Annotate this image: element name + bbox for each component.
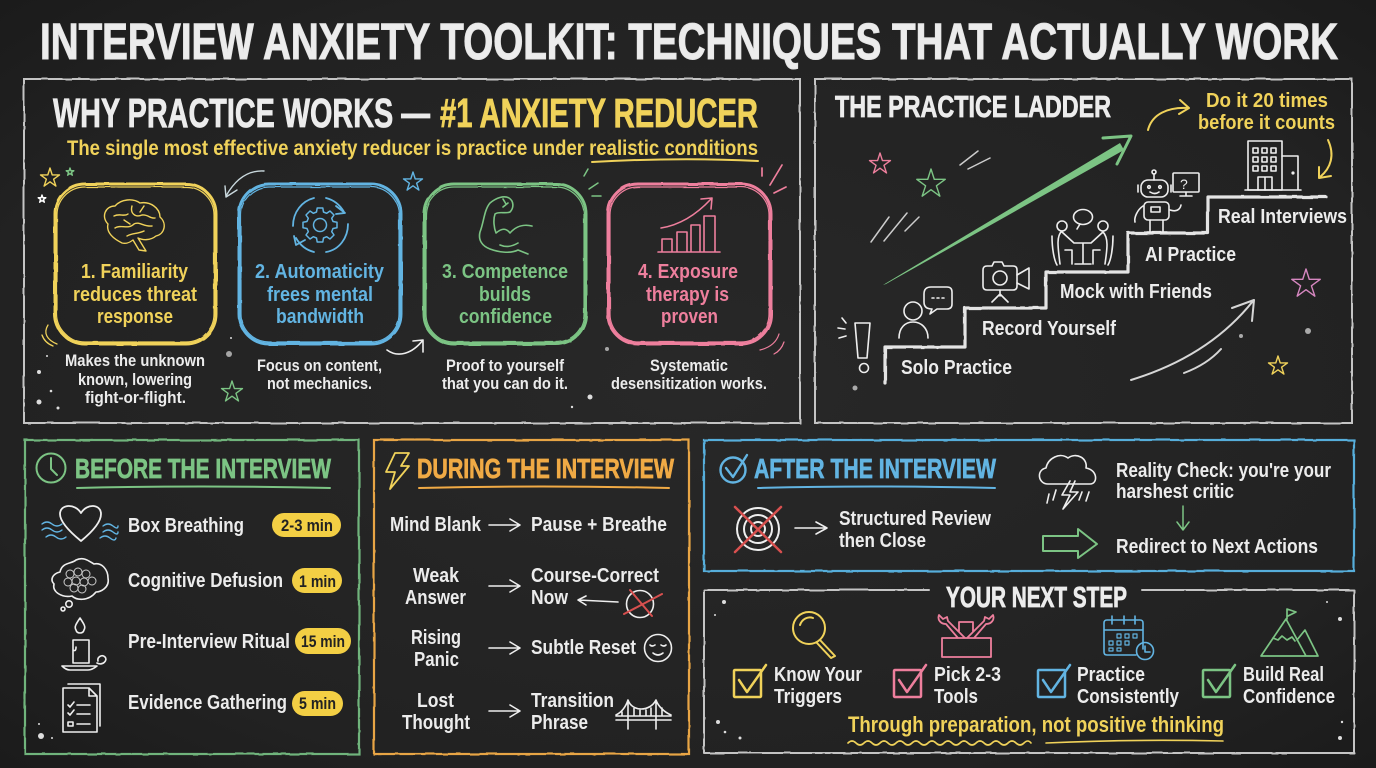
item: know your triggers	[734, 612, 862, 708]
callout: do it 20 times: before it counts	[1198, 112, 1335, 134]
row: weak answer: Answer	[405, 587, 466, 609]
icon: crossed target	[735, 507, 781, 552]
icon: rising bar chart	[658, 198, 720, 252]
item: pick tools	[894, 615, 1001, 708]
panel border	[704, 440, 1354, 571]
step labels: AI Practice	[1145, 244, 1236, 266]
icon: crossed circle	[624, 590, 662, 618]
card 3 caption: that you can do it.	[442, 374, 568, 393]
step labels: Mock with Friends	[1060, 281, 1212, 303]
text: structured review: Structured Review	[839, 508, 991, 530]
icon: clock	[36, 454, 66, 482]
label: Practice	[1077, 664, 1145, 686]
card 2: automaticity	[239, 184, 401, 393]
arrow: curved between cards 2 and 3	[387, 340, 423, 354]
card 1 title: reduces threat	[73, 284, 197, 306]
card 3 caption: Proof to yourself	[446, 356, 564, 375]
time pill: 2-3 min	[281, 516, 333, 535]
arrow	[489, 705, 520, 717]
card 2 caption: not mechanics.	[267, 374, 372, 393]
arrow: green block	[1043, 529, 1097, 558]
card 4 title: therapy is	[646, 284, 729, 306]
text: reality check: harshest critic	[1116, 481, 1234, 503]
panel: during the interview	[374, 440, 689, 754]
icon: robot and monitor	[1135, 170, 1199, 232]
heading underline	[77, 486, 330, 488]
card 4 title: proven	[661, 306, 718, 328]
icon: tangled thought cloud	[52, 559, 108, 611]
row: cognitive defusion	[52, 559, 342, 611]
row: lost thought: Phrase	[531, 712, 588, 734]
label: Tools	[934, 686, 978, 708]
row: weak answer: Now	[531, 587, 568, 609]
icon: check circle	[720, 455, 747, 482]
label: Confidence	[1243, 686, 1335, 708]
text: structured review	[839, 508, 991, 552]
card 2 caption: Focus on content,	[257, 356, 382, 375]
arrow: small green down	[1177, 506, 1189, 530]
arrow	[489, 642, 520, 654]
time pill	[295, 628, 351, 654]
monitor question mark: ?	[1180, 176, 1188, 192]
row: mind blank: Mind Blank	[390, 514, 482, 536]
row: lost thought: Lost	[417, 690, 454, 712]
icon: exclamation	[838, 318, 870, 372]
chalk dust	[38, 723, 53, 739]
card 3 title: builds	[479, 284, 531, 306]
text: structured review: then Close	[839, 530, 926, 552]
row: weak answer: Course-Correct	[531, 565, 659, 587]
row: lost thought: Transition	[531, 690, 614, 712]
text: reality check: Reality Check: you're your	[1116, 460, 1331, 482]
card 1 outline	[55, 184, 216, 344]
label	[1077, 664, 1180, 708]
text: redirect: Redirect to Next Actions	[1116, 536, 1318, 558]
row: rising panic: Panic	[414, 649, 459, 671]
label: Pick 2-3	[934, 664, 1001, 686]
tagline: Through preparation, not positive thinking	[848, 712, 1224, 737]
card 2 caption	[257, 356, 382, 393]
card 2 title: bandwidth	[276, 306, 364, 328]
card 3 title: confidence	[459, 306, 552, 328]
card 2 title: 2. Automaticity	[255, 261, 385, 283]
card 4 title	[638, 261, 738, 328]
icon: brain	[104, 200, 164, 251]
label	[934, 664, 1001, 708]
row: evidence gathering	[63, 684, 343, 732]
panel border	[374, 440, 689, 754]
subheading underline	[592, 159, 758, 162]
staircase	[885, 197, 1326, 383]
label: Consistently	[1077, 686, 1180, 708]
card 1 title: 1. Familiarity	[81, 261, 189, 283]
heading highlight: number one anxiety reducer: #1 ANXIETY REDUCER	[440, 90, 758, 136]
time pill: 15 min	[301, 632, 345, 651]
heading: why practice works: WHY PRACTICE WORKS —	[53, 90, 430, 136]
card 4 caption	[611, 356, 767, 393]
icon: lightning bolt	[386, 453, 409, 489]
tagline underlines	[848, 740, 1223, 745]
icon: video camera	[983, 262, 1029, 302]
icon: calendar with clock	[1104, 616, 1154, 660]
label: Build Real	[1243, 664, 1324, 686]
icon: mountain with flag	[1261, 609, 1318, 656]
arrow	[795, 522, 827, 534]
card 1 caption	[65, 351, 205, 407]
check box	[1203, 665, 1235, 697]
text: reality check	[1116, 460, 1331, 503]
card 3 outline	[424, 184, 586, 344]
arrow: green rising	[883, 136, 1131, 285]
panel border	[25, 440, 359, 754]
time pill	[292, 568, 342, 593]
card 4: exposure	[608, 184, 771, 393]
row: lost thought: Thought	[402, 712, 470, 734]
row: pre-interview ritual	[62, 618, 351, 670]
card 1 caption: known, lowering	[78, 370, 192, 389]
step labels: Solo Practice	[901, 357, 1012, 379]
label: Triggers	[774, 686, 842, 708]
time pill: 5 min	[299, 694, 336, 713]
panel: practice ladder	[815, 79, 1352, 423]
panel border	[24, 79, 800, 423]
card 4 caption: desensitization works.	[611, 374, 767, 393]
step labels: Record Yourself	[982, 318, 1116, 340]
heading: AFTER THE INTERVIEW	[754, 453, 996, 484]
icon: person with speech bubble	[899, 287, 952, 338]
panel border	[815, 79, 1352, 423]
label: Evidence Gathering	[128, 692, 287, 714]
chalk dust	[714, 600, 1343, 740]
icon: office building	[1245, 141, 1301, 190]
time pill	[292, 691, 343, 716]
heading underline	[758, 486, 995, 488]
arrow	[489, 580, 520, 592]
row: rising panic: Subtle Reset	[531, 637, 636, 659]
arrow	[489, 519, 520, 531]
panel border	[704, 590, 1354, 753]
heading: YOUR NEXT STEP	[946, 582, 1127, 614]
icon: candle	[62, 618, 106, 670]
label: Pre-Interview Ritual	[128, 631, 290, 653]
heading underline	[419, 486, 669, 488]
card 4 outline	[608, 184, 771, 344]
subheading: The single most effective anxiety reducer is practice under realistic conditions	[67, 137, 758, 160]
heading: BEFORE THE INTERVIEW	[75, 453, 331, 484]
check box	[894, 665, 926, 697]
card 1: familiarity	[55, 184, 216, 407]
row: rising panic: Rising	[411, 627, 461, 649]
check box	[1038, 665, 1070, 697]
card 3 title	[442, 261, 568, 328]
icon: documents checklist	[63, 684, 100, 732]
panel: your next step	[704, 582, 1354, 753]
card 3 title: 3. Competence	[442, 261, 568, 283]
icon: bridge	[616, 700, 671, 729]
card 1 title	[73, 261, 197, 328]
card 1 caption: fight-or-flight.	[85, 388, 186, 407]
time pill	[272, 513, 341, 537]
card 2 title: frees mental	[267, 284, 373, 306]
row: box breathing	[42, 506, 341, 541]
step labels	[901, 206, 1347, 379]
heading: DURING THE INTERVIEW	[417, 453, 674, 484]
card 3: competence	[424, 184, 586, 393]
callout: do it 20 times	[1198, 90, 1335, 134]
chalk dust dots	[36, 337, 609, 410]
arrow: curved between cards 1 and 2	[225, 171, 264, 197]
callout: do it 20 times: Do it 20 times	[1206, 90, 1328, 112]
time pill: 1 min	[299, 572, 336, 591]
label: Cognitive Defusion	[128, 570, 283, 592]
icon: storm cloud	[1039, 456, 1096, 509]
row: weak answer: Weak	[413, 565, 460, 587]
step labels: Real Interviews	[1218, 206, 1347, 228]
card 3 caption	[442, 356, 568, 393]
icon: magnifying glass	[793, 612, 835, 658]
label: Box Breathing	[128, 515, 244, 537]
decorative stars	[38, 165, 786, 401]
panel: why practice works	[24, 79, 800, 423]
item: build real confidence	[1203, 609, 1335, 708]
card 1 caption: Makes the unknown	[65, 351, 205, 370]
icon: calm face	[644, 634, 672, 662]
icon: friends at table	[1052, 210, 1113, 265]
card 2 outline	[239, 184, 401, 344]
label	[1243, 664, 1335, 708]
card 4 caption: Systematic	[650, 356, 728, 375]
icon: gear with cycle arrows	[293, 198, 348, 252]
panel: before the interview	[25, 440, 359, 754]
arrow: white curved rising	[1131, 300, 1254, 380]
card 4 title: 4. Exposure	[638, 261, 738, 283]
arrow: yellow to top step	[1319, 140, 1331, 178]
card 2 title	[255, 261, 385, 328]
panel: after the interview	[704, 440, 1354, 571]
label	[774, 664, 862, 708]
small arrow left	[578, 596, 618, 605]
arrow: yellow to callout	[1148, 100, 1189, 130]
check box	[734, 665, 766, 697]
icon: toolbox	[938, 615, 994, 657]
decorative stars and strokes	[852, 151, 1320, 390]
row: weak answer	[405, 565, 662, 618]
row: rising panic	[411, 627, 672, 671]
row: mind blank: Pause + Breathe	[531, 514, 667, 536]
heading: THE PRACTICE LADDER	[835, 89, 1111, 124]
card 1 title: response	[97, 306, 173, 328]
label: Know Your	[774, 664, 862, 686]
icon: heart with waves	[42, 506, 118, 541]
item: practice consistently	[1038, 616, 1180, 708]
row: lost thought	[402, 690, 671, 734]
icon: flexed bicep	[479, 197, 532, 254]
row: mind blank	[390, 514, 667, 536]
